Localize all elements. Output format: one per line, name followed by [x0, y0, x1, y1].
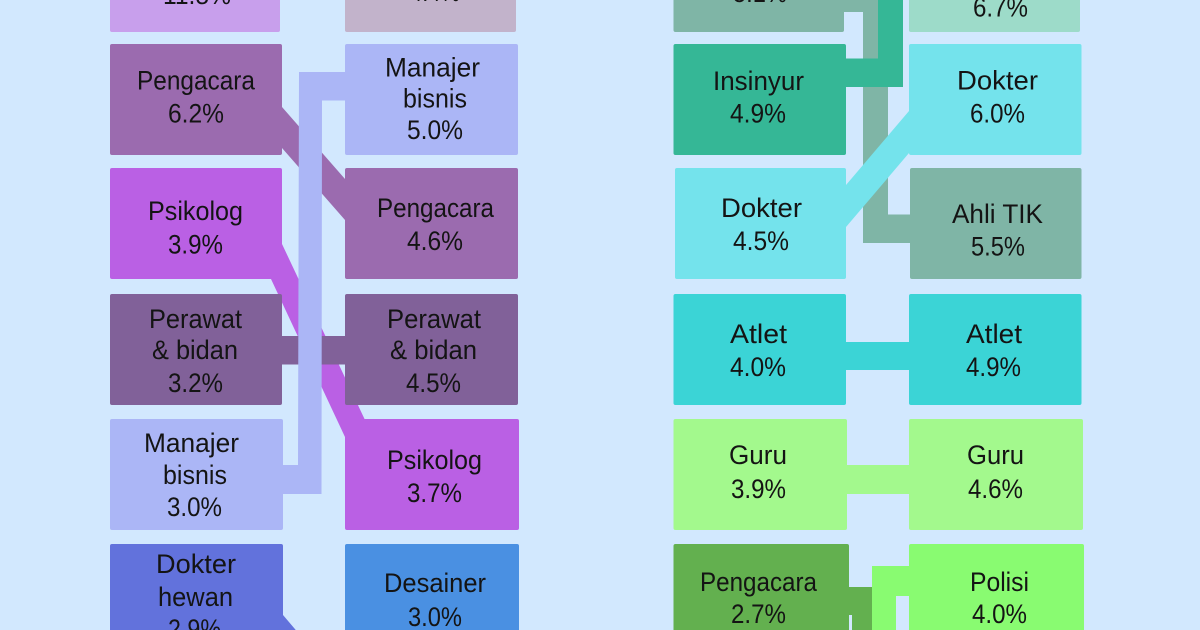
box: Atlet left	[674, 294, 846, 405]
box: left top green-grey	[674, 0, 844, 32]
box: Perawat left: 3.2%	[168, 368, 223, 398]
box: Psikolog right: Psikolog	[387, 445, 482, 475]
box: Atlet left: Atlet	[730, 319, 788, 349]
box: Dokter left: Dokter	[721, 193, 802, 223]
connector: Dokter	[846, 111, 909, 227]
box: Pengacara right: Pengacara	[377, 193, 494, 223]
box: Ahli TIK right: Ahli TIK	[952, 199, 1043, 229]
box: Guru left: 3.9%	[731, 474, 786, 504]
box: Perawat left: & bidan	[152, 335, 238, 365]
box: right top mint	[909, 0, 1080, 32]
box: Pengacara green left: 2.7%	[731, 599, 786, 629]
connector: Pengacara green	[849, 587, 873, 630]
box: Pengacara right: 4.6%	[407, 226, 463, 256]
box: Manajer bisnis left: bisnis	[163, 460, 227, 490]
box: Atlet left: 4.0%	[730, 352, 786, 382]
connector: Psikolog	[271, 244, 365, 437]
box: Guru left	[674, 419, 847, 530]
box: Dokter hewan left: Dokter	[156, 549, 236, 579]
box: Pengacara left: 6.2%	[168, 98, 224, 128]
box: Polisi right: Polisi	[970, 567, 1029, 597]
box: Pengacara green left	[674, 544, 849, 630]
box: right top	[345, 0, 516, 32]
connector: Insinyur	[846, 0, 903, 87]
connector: Atlet	[846, 342, 909, 370]
box: Atlet right	[909, 294, 1082, 405]
box: Pengacara right	[345, 168, 518, 279]
box: Pengacara green left: Pengacara	[700, 567, 817, 597]
box: Insinyur left: Insinyur	[713, 66, 804, 96]
box: Guru right: 4.6%	[968, 474, 1023, 504]
box: Perawat left	[110, 294, 282, 405]
box: Dokter hewan left	[110, 544, 283, 630]
box: Manajer bisnis left	[110, 419, 283, 530]
connector: Polisi	[872, 566, 909, 630]
box: Perawat right	[345, 294, 518, 405]
box: Perawat left: Perawat	[149, 304, 243, 334]
box: Ahli TIK right: 5.5%	[971, 232, 1025, 262]
box: Dokter left: 4.5%	[733, 226, 789, 256]
box: Atlet right: Atlet	[966, 319, 1023, 349]
box: Atlet right: 4.9%	[966, 352, 1021, 382]
box: Guru left: Guru	[729, 440, 787, 470]
box: Desainer right: Desainer	[384, 568, 486, 598]
box: Ahli TIK right	[910, 168, 1082, 279]
box: Guru right: Guru	[967, 440, 1024, 470]
box: Pengacara left	[110, 44, 282, 155]
panel: left chart	[110, 0, 519, 630]
box: Psikolog left	[110, 168, 282, 279]
box: Perawat right: & bidan	[390, 335, 477, 365]
box: Manajer bisnis right: Manajer	[385, 52, 480, 82]
box: Dokter left	[675, 168, 846, 279]
box: Perawat right: Perawat	[387, 304, 482, 334]
box: Dokter hewan left: hewan	[158, 582, 233, 612]
connector: Manajer bisnis	[283, 72, 345, 494]
box: left top	[110, 0, 280, 32]
connector: Perawat & bidan	[282, 336, 345, 364]
box: Pengacara left: Pengacara	[137, 66, 255, 96]
box: Psikolog right	[345, 419, 519, 530]
box: Insinyur left	[674, 44, 846, 155]
box: Guru right	[909, 419, 1083, 530]
box: Manajer bisnis left: Manajer	[144, 428, 239, 458]
box: Desainer right	[345, 544, 519, 630]
connector: Pengacara	[282, 107, 345, 220]
box: Perawat right: 4.5%	[406, 368, 461, 398]
connector: Dokter hewan	[283, 615, 300, 630]
box: Polisi right	[909, 544, 1084, 630]
box: Psikolog left: 3.9%	[168, 230, 223, 260]
connector: Ahli TIK	[844, 0, 910, 243]
box: Manajer bisnis right: bisnis	[403, 84, 467, 114]
box: Polisi right: 4.0%	[972, 599, 1027, 629]
box: Psikolog right: 3.7%	[407, 478, 462, 508]
panel: right chart	[674, 0, 1084, 630]
connector: Guru	[847, 465, 909, 494]
box: Psikolog left: Psikolog	[148, 196, 243, 226]
box: Manajer bisnis right: 5.0%	[407, 115, 463, 145]
box: Dokter right	[909, 44, 1082, 155]
box: Dokter right: 6.0%	[970, 98, 1025, 128]
box: Insinyur left: 4.9%	[730, 98, 786, 128]
box: Dokter right: Dokter	[957, 66, 1038, 96]
box: Manajer bisnis right	[345, 44, 518, 155]
box: Manajer bisnis left: 3.0%	[167, 492, 222, 522]
